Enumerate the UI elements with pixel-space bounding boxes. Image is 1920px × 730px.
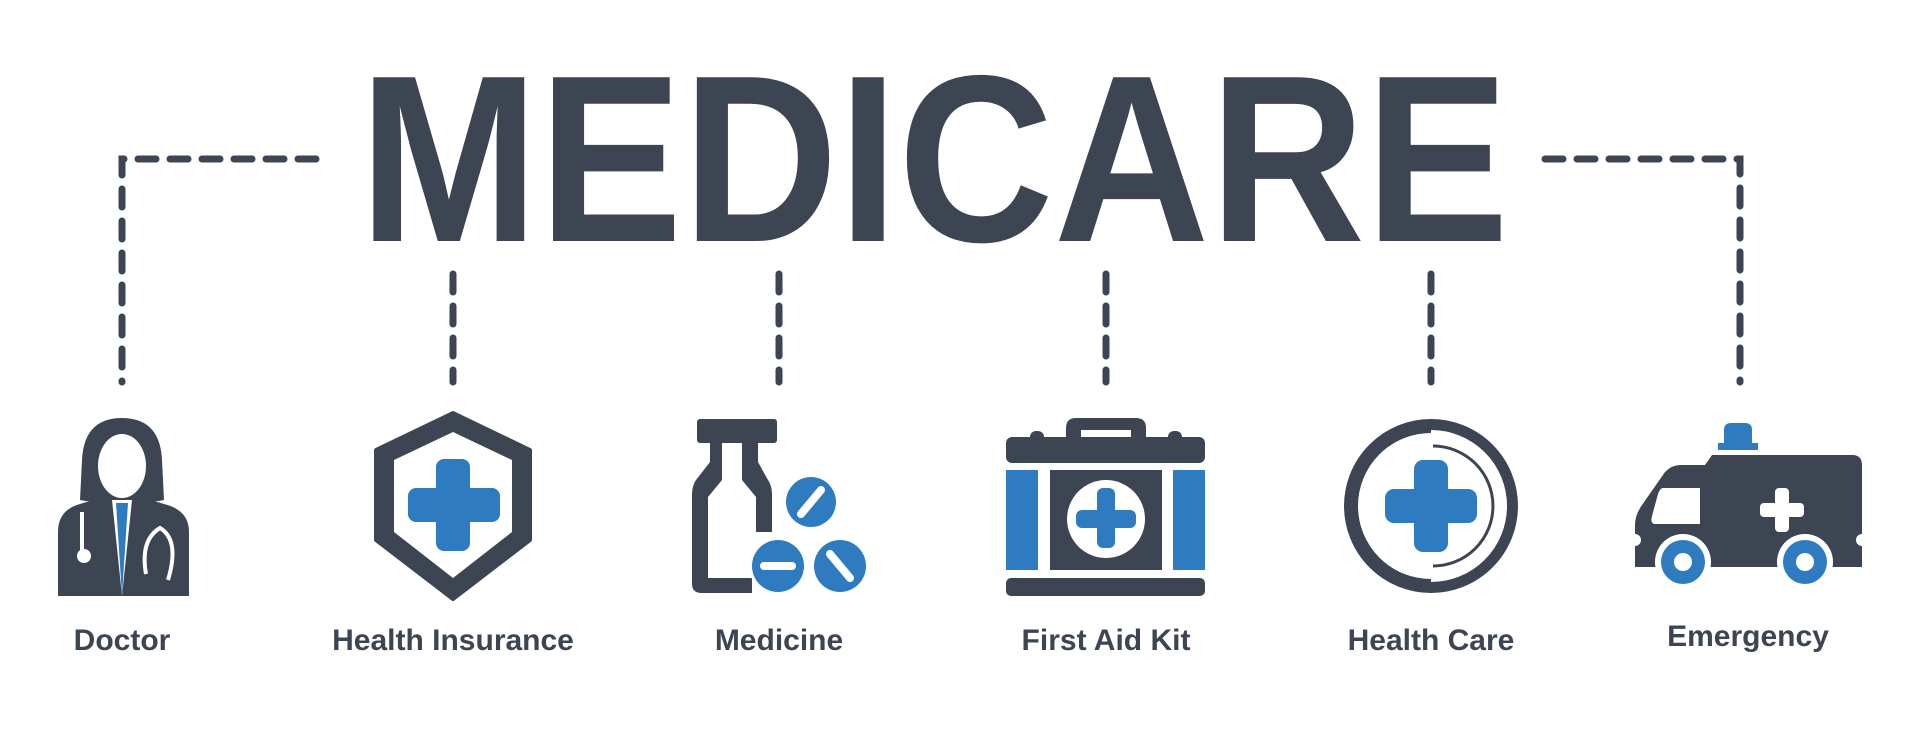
connector: health care xyxy=(1428,274,1434,382)
icon: first aid kit xyxy=(1006,418,1205,596)
connector: medicine xyxy=(776,274,782,382)
icon: health care xyxy=(1351,426,1511,586)
label: Medicine: Medicine xyxy=(715,624,843,657)
title: MEDICARE xyxy=(359,27,1509,292)
icon: medicine xyxy=(692,419,866,595)
connector: health insurance xyxy=(450,274,456,382)
label: Doctor: Doctor xyxy=(74,624,171,657)
icon: health insurance shield xyxy=(376,413,530,599)
label: Health Care: Health Care xyxy=(1348,624,1514,657)
icon: doctor xyxy=(58,418,189,596)
connector: first aid kit xyxy=(1102,274,1110,382)
label: Health Insurance: Health Insurance xyxy=(332,624,574,657)
label: Emergency: Emergency xyxy=(1667,620,1829,653)
label: First Aid Kit: First Aid Kit xyxy=(1022,624,1190,657)
connector: right dashed line xyxy=(1545,159,1740,382)
connector: left dashed line xyxy=(122,159,316,382)
icon: ambulance xyxy=(1629,423,1868,590)
